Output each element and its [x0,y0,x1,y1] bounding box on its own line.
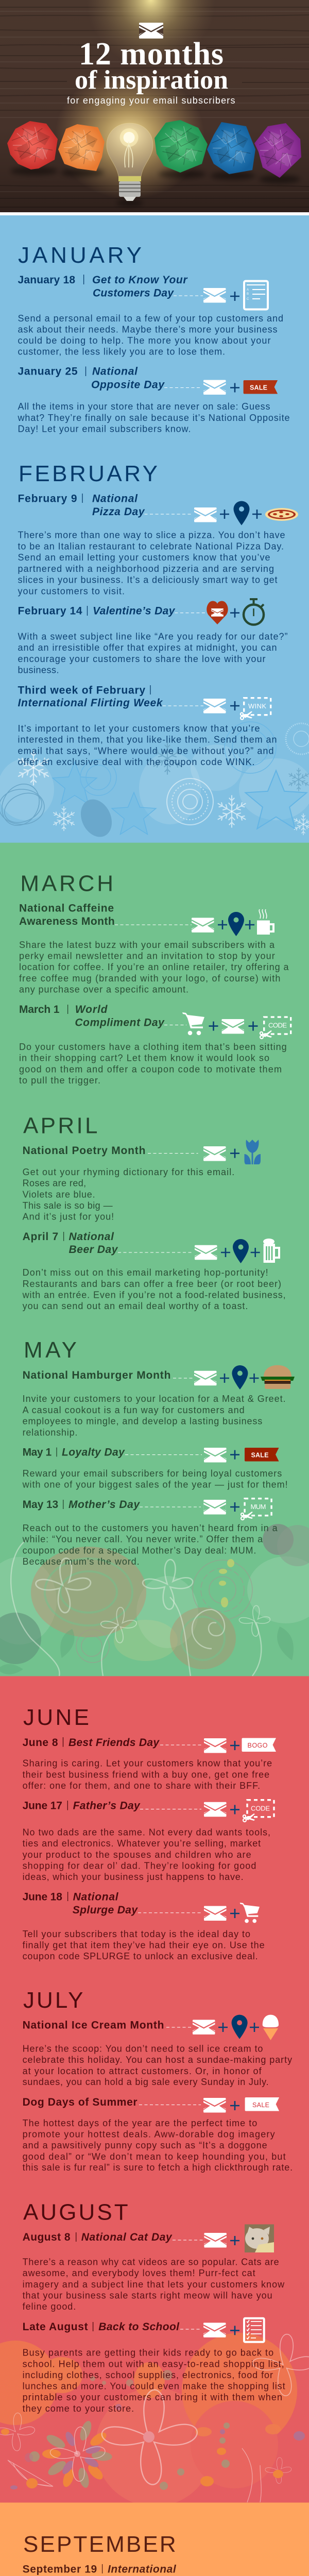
flower with teardrop petals [42,2419,113,2489]
icons: cart, email, coupon [182,1012,291,1039]
body text [18,401,289,434]
body text: with an entrée. Even if you’re not a food-related business, [22,1290,286,1300]
icons: email plus checklist [203,2318,264,2342]
section: September [22,2532,295,2576]
body text: to be an Italian restaurant to celebrate National Pizza Day. [18,541,284,551]
body text: imagery and a subject line that lets your customers know [23,2279,285,2290]
entry: March 1 World Compliment Day: Compliment Day [75,1017,165,1029]
entry: June 18 National Splurge Day: Splurge Day [73,1904,138,1916]
body text: feline good. [23,2301,76,2312]
body text: A casual cookout is a fun way for customers and [23,1405,245,1415]
body text: Don’t miss out on this email marketing hop-portunity! [23,1267,268,1278]
month heading: JULY [23,1988,83,2013]
body text: There’s more than one way to slice a pizza. You don’t have [18,530,285,540]
body text: and a pawsitively punny copy such as “It’s a doggone [23,2140,267,2150]
icons: email plus coupon: WINK [248,702,266,710]
entry: April 7 National Beer Day: Beer Day [69,1244,118,1256]
body text: Share the latest buzz with your email subscribers with a [19,940,275,950]
body text: Sharing is caring. Let your customers know that you’re [23,1758,272,1769]
entry: May 13 Mother's Day: Mother’s Day [68,1499,140,1511]
entry: January 18 [18,274,283,357]
body text: including clothes, school supplies, electronics, food for [23,2370,273,2380]
entry: Talk Like a Pirate Day: International [108,2563,177,2575]
icons: email plus cart [204,1903,260,1923]
body text: school. Help them out with an easy-to-read shopping list, [23,2359,284,2369]
entry: National Poetry Month [23,1140,261,1222]
entry: International Flirting Week [18,684,277,767]
icon: envelope [139,23,163,39]
body text: celebrate this holiday. You can host a sundae-making party [23,2055,292,2065]
body text: lunches and more. You could even make the shopping list [23,2381,285,2391]
body text: relationship. [23,1427,77,1437]
entry: May 1 Loyalty Day: Loyalty Day [62,1447,125,1459]
month heading: AUGUST [23,2199,128,2225]
entry: February 14 [18,599,287,675]
body text [23,2257,285,2312]
icons: email plus sale [204,1448,279,1462]
icons: email plus survey: A [247,289,249,292]
body text: any purchase over a specific amount. [19,984,188,994]
entry: National Caffeine Awareness Month [19,902,289,994]
body text: shopping for dear ol’ dad. They’re looking for good [23,1860,256,1871]
body text: Here’s the scoop: You don’t need to sell ice cream to [23,2043,263,2054]
entry: August 8 National Cat Day: National Cat Day [81,2231,173,2243]
panel: winter blue (January, February) [0,215,309,843]
body text: finally get that item they’ve had their eye on. Use the [23,1940,265,1951]
month heading: JANUARY [18,243,142,268]
body text: printable so your customers can bring it with them when [23,2392,282,2402]
body text: No two dads are the same. Not every dad wants tools, [23,1827,270,1837]
body text: coupon code SPLURGE to unlock an exclusive deal. [23,1951,258,1961]
panel: autumn orange (September, October, November) [0,2503,309,2576]
section: August [23,2199,285,2414]
entry: National Ice Cream Month [23,2015,292,2087]
entry: Dog Days of Summer [23,2096,293,2173]
body text: There’s a reason why cat videos are so popular. Cats are [23,2257,279,2267]
body text: Invite your customers to your location for a Meat & Greet. [23,1394,286,1404]
month heading: MAY [24,1337,77,1363]
entry: National Caffeine Awareness Month: National Caffeine [19,902,114,914]
body text: awesome, and everybody loves them! Purr-fect cat [23,2268,255,2278]
icons: email plus sale [203,2097,279,2112]
icons: cart, email, coupon: CODE [268,1021,287,1029]
section: April [22,1113,286,1311]
panel: summer red (June, July, August) [0,1676,309,2506]
body text: Reach out to the customers you haven’t heard from in a [23,1523,278,1533]
body text: your customers to visit. [18,586,125,596]
entry: April 7 National Beer Day [22,1231,286,1311]
section: May [22,1337,295,1567]
entry: June 8 Best Friends Day: Best Friends Day [68,1737,160,1749]
icons: email plus coupon: MUM [250,1503,266,1511]
body text: what? They’re finally on sale because it’s National Opposite [18,413,289,423]
body text: It’s important to let your customers know that you’re [18,723,260,734]
body text [23,1758,272,1791]
entry: January 25: National [92,366,138,378]
body text: poem [23,1167,234,1222]
body text [23,1394,286,1437]
entry: January 25: Opposite Day [91,379,165,391]
body text: and an irresistible offer that expires at midnight, you can [18,642,277,653]
title: 12 months [79,37,224,72]
body text: could be doing to help. The more you know about your [18,335,270,346]
entry: February 9: National [92,493,138,505]
body text: Send an email letting your customers know that you’ve [18,552,270,563]
icons: email, location, beer [195,1239,280,1263]
section: March [19,871,291,1086]
entry: February 9 [18,493,298,596]
body text: with one of your biggest sales of the year — just for them! [22,1480,288,1490]
icons: email plus sale [203,380,278,395]
section: June [23,1705,276,1961]
entry: Talk Like a Pirate Day: September 19 [23,2563,97,2575]
section: January [18,243,289,434]
entry: June 17 Father's Day [23,1800,274,1882]
entry: Late August Back to School: Late August [23,2321,88,2333]
body text: interested in them, that you like-like them. Send them an [18,735,277,745]
body text: promote your hottest deals. Aww-dorable dog imagery [23,2129,275,2140]
entry: June 8 Best Friends Day [23,1737,276,1791]
body text [23,1827,270,1882]
body text [23,2118,293,2173]
body text: your product to the spouses and children who are [23,1850,251,1860]
background decoration: summer flowers [0,2333,309,2506]
entry: April 7 National Beer Day: National [69,1231,114,1243]
body text: Restaurants and bars can offer a free beer (or root beer) [23,1279,281,1289]
section: February [18,461,298,767]
icons: email plus BOGO [204,1738,276,1753]
month heading: FEBRUARY [19,461,158,486]
body text [19,1042,287,1086]
body text: Send a personal email to a few of your top customers and [18,313,283,324]
body text: business. [18,665,59,675]
entry: International Flirting Week: Third week of February [18,684,145,696]
entry: June 8 Best Friends Day: June 8 [23,1737,58,1749]
entry: June 18 National Splurge Day [23,1891,265,1961]
section: July [23,1988,293,2173]
icons: email plus sale: SALE [252,2102,269,2109]
body text [22,1523,278,1567]
background decoration: flowers [0,1524,309,1676]
body text: encourage your customers to share the love with your [18,654,266,664]
entry: February 14: Valentine’s Day [93,605,176,617]
icons: email plus survey [203,281,268,309]
body text: slices in your business. It’s a deliciously smart way to get [18,575,277,585]
icons: email plus coupon [204,1800,274,1822]
body text: Because mum’s the word. [23,1556,140,1567]
body text [22,1468,288,1490]
entry: January 18: Customers Day [93,287,174,299]
entry: National Caffeine Awareness Month: Awareness Month [19,916,115,927]
entry: March 1 World Compliment Day: World [75,1004,108,1015]
entry: May 13 Mother's Day: May 13 [23,1499,58,1511]
body text [18,632,287,675]
entry: March 1 World Compliment Day [19,1004,291,1086]
icons: email, location, burger [194,1365,295,1389]
entry: February 9: February 9 [18,493,77,505]
body text: their best business friend with a buy one, get one free [23,1769,269,1780]
icons: email plus coupon [203,698,271,719]
icons: email plus cat photo [204,2224,274,2252]
entry: January 18: Get to Know Your [92,274,188,286]
icons: email plus tulip [203,1140,261,1164]
month heading: JUNE [23,1705,89,1730]
entry: May 1 Loyalty Day [22,1447,288,1490]
background decoration: snowflakes and stars [0,722,309,842]
month heading: MARCH [20,871,113,896]
icons: email, location, pizza [194,501,298,526]
body text [19,940,289,994]
body text: poem: Violets are blue. [23,1189,95,1199]
icons: email plus sale: SALE [250,384,267,392]
entry: June 18 National Splurge Day: National [73,1891,119,1903]
entry: National Hamburger Month: National Hamburger Month [23,1369,170,1381]
panel: spring green (March, April, May) [0,843,309,1676]
body text: poem: This sale is so big — [23,1200,113,1211]
entry: January 25: January 25 [18,366,78,378]
body text: All the items in your store that are never on sale: Guess [18,401,270,412]
hero panel [0,0,309,212]
icons: heart email and stopwatch [207,599,264,624]
entry: Dog Days of Summer: Dog Days of Summer [23,2096,138,2108]
body text [23,2347,285,2414]
body text: in their shopping cart? Let them know it would look so [19,1053,269,1063]
body text [22,1267,286,1311]
entry: August 8 National Cat Day: August 8 [23,2231,71,2243]
body text: coupon code for a special Mother’s Day deal: MUM. [23,1545,256,1555]
body text: good on them and offer a coupon code to motivate them [19,1064,282,1074]
icons: email plus coupon: CODE [251,1804,270,1812]
body text: Tell your subscribers that today is the ideal day to [23,1929,250,1939]
illustration: paper balls and light bulb [7,120,301,206]
body text: location for coffee. If you’re an online retailer, try offering a [19,962,289,972]
body text: partnered with a neighborhood pizzeria and are serving [18,564,274,574]
subtitle: for engaging your email subscribers [67,95,235,106]
entry: April 7 National Beer Day: April 7 [23,1231,58,1243]
entry: January 25 [18,366,289,434]
body text: The hottest days of the year are the perfect time to [23,2118,257,2128]
body text: at your location to attract customers. Or, in honor of [23,2066,262,2076]
entry: National Poetry Month: National Poetry Month [23,1145,145,1157]
body text: poem: Roses are red, [23,1178,86,1189]
entry: June 18 National Splurge Day: June 18 [23,1891,62,1903]
icons: email, location, ice cream [193,2015,279,2040]
body text [23,2043,292,2087]
body text [18,530,285,596]
entry: May 1 Loyalty Day: May 1 [23,1447,52,1459]
body text: ties and electronics. Whatever you’re selling, market [23,1838,261,1849]
entry: Talk Like a Pirate Day [22,2563,295,2576]
body text: ideas, which your business just happens to have. [23,1872,244,1882]
body text: Reward your email subscribers for being loyal customers [23,1468,282,1479]
body text: ask about their needs. Maybe there’s more your business [18,325,277,335]
body text: to pull the trigger. [19,1075,100,1086]
body text: good deal” or “We don’t mean to keep hounding you, but [23,2151,286,2162]
month heading: SEPTEMBER [23,2532,176,2557]
body text: perky email newsletter and an invitation to stop by your [19,951,275,961]
entry: Late August Back to School: Back to School [98,2321,180,2333]
body text: sundaes, you can hold a big sale every Sunday in July. [23,2077,269,2087]
body text [18,723,277,767]
body text: while: “You never call. You never write.” Offer them a [22,1534,263,1545]
entry: February 9: Pizza Day [92,506,145,518]
icons: email plus coupon [203,1499,271,1520]
body text: they come to your store. [23,2403,134,2414]
title: of inspiration [75,65,228,95]
entry: National Hamburger Month [23,1365,295,1437]
entry: January 18: January 18 [18,274,75,286]
body text: customer, the less likely you are to lose them. [18,347,225,357]
body text: poem: And it’s just for you! [23,1212,114,1222]
body text: that your business sale starts right meow will have you [23,2290,272,2300]
entry: National Ice Cream Month: National Ice Cream Month [23,2020,164,2031]
body text: Busy parents are getting their kids ready to go back to [23,2347,273,2358]
icons: email plus sale: SALE [251,1452,269,1459]
body text: With a sweet subject line like “Are you ready for our date?” [18,632,287,642]
body text: poem: Get out your rhyming dictionary for this email. [23,1167,234,1177]
entry: May 13 Mother's Day [22,1499,278,1567]
body text: you can send out an email deal worthy of a toast. [23,1301,248,1311]
body text [23,1929,265,1961]
body text: this sale is fur real” is sure to fetch a high clickthrough rate. [23,2162,293,2173]
title [75,37,228,95]
entry: August 8 National Cat Day [23,2224,285,2312]
body text [18,313,283,357]
month heading: APRIL [23,1113,98,1139]
icons: email plus BOGO: BOGO [247,1742,268,1749]
entry: February 14: February 14 [18,605,82,617]
body text: free coffee mug (branded with your logo, of course) with [19,973,280,984]
body text: employees to mingle, and develop a lasting business [23,1416,262,1427]
entry: March 1 World Compliment Day: March 1 [19,1004,60,1015]
body text: Day! Let your email subscribers know. [18,424,191,434]
body text: Do your customers have a clothing item that’s been sitting [19,1042,287,1052]
icons: email, location, coffee [192,909,274,936]
body text: offer: one for them, and one to share with their BFF. [23,1781,260,1791]
entry: June 17 Father's Day: Father’s Day [73,1800,141,1811]
entry: International Flirting Week: International Flirting Week [18,697,163,709]
body text: offer an exclusive deal with the coupon code WINK. [18,757,254,767]
body text: email that says, “Where would we be without you?” and [18,746,274,756]
icons: email plus survey: B [247,293,249,296]
icons: email plus survey: C [247,298,249,301]
entry: Late August Back to School [23,2318,285,2414]
entry: June 17 Father's Day: June 17 [23,1800,62,1811]
